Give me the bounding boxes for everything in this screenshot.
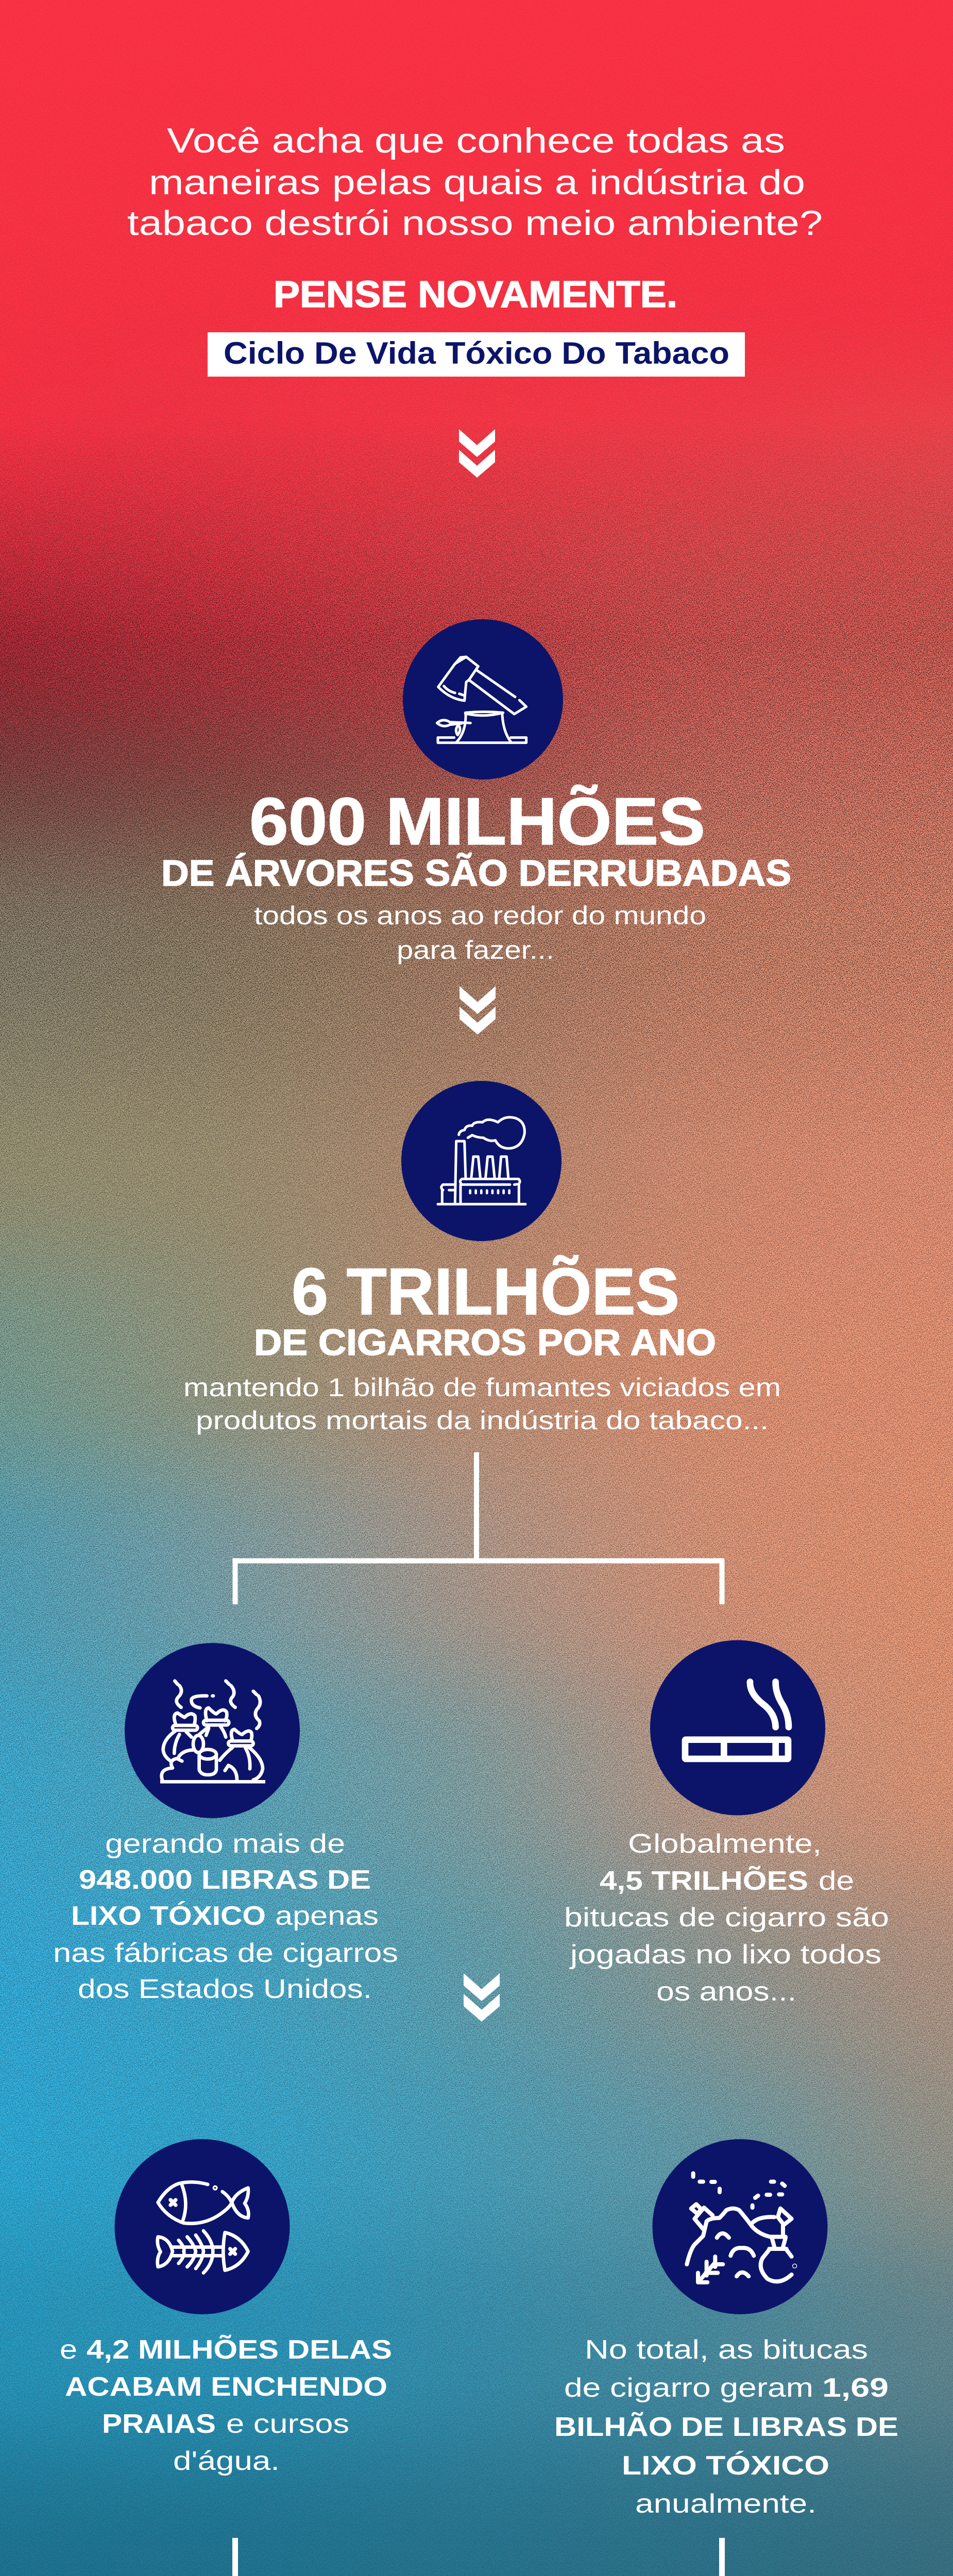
text: 1,69 bilhao: LIXO TÓXICO [622,2451,829,2481]
panel: 4,5 trilhoes de bitucas [564,1640,889,2007]
icon: trash mound [652,2139,827,2314]
text: 4,5 trilhoes [564,1829,889,2007]
text: 948.000 libras: dos Estados Unidos. [78,1974,372,2004]
icon: dead fish [114,2139,290,2314]
heading: pense novamente: PENSE NOVAMENTE. [274,274,677,315]
text: 1,69 bilhao: de cigarro geram [564,2373,813,2403]
subheading: cigarros: DE CIGARROS POR ANO [254,1323,716,1363]
icon: cigarette [650,1640,825,1816]
text: 1,69 bilhao: 1,69 [822,2373,889,2403]
panel: lixo toxico nas fabricas [53,1643,398,2004]
intro question: tabaco destrói nosso meio ambiente? [127,204,823,243]
text: 4,5 trilhoes: os anos... [656,1977,796,2007]
text: 948.000 libras: apenas [275,1901,379,1931]
text: 4,2 milhoes: ACABAM ENCHENDO [65,2372,387,2402]
body text: produtos mortais da indústria do tabaco... [196,1406,769,1435]
figure: 6 trilhoes: 6 TRILHÕES [292,1255,679,1329]
panel: 6 trilhoes [183,1081,781,1435]
icon: garbage bags [125,1643,300,1818]
panel: praias e cursos d'agua [60,2139,392,2476]
text: 4,2 milhoes: d'água. [173,2446,280,2476]
icon: axe and stump [403,619,563,779]
text: 4,2 milhoes: e [60,2335,77,2365]
text: 4,2 milhoes: e cursos [226,2409,349,2439]
arrow: double chevron [464,1973,500,2022]
connector: bottom branch [235,2538,722,2576]
text: 948.000 libras [53,1829,398,2004]
label: ciclo de vida: Ciclo De Vida Tóxico Do Tabaco [224,336,729,370]
text: 4,5 trilhoes: bitucas de cigarro são [564,1903,889,1933]
arrow: double chevron [460,986,496,1035]
label: ciclo de vida [208,332,745,377]
text: 1,69 bilhao [554,2335,898,2519]
text: 948.000 libras: LIXO TÓXICO [71,1901,266,1931]
text: 1,69 bilhao: anualmente. [635,2489,816,2519]
body text: mantendo 1 bilhão de fumantes viciados em [183,1373,781,1402]
panel: 1,69 bilhao de libras [554,2139,898,2519]
intro question: maneiras pelas quais a indústria do [149,163,805,202]
text: 948.000 libras: 948.000 LIBRAS DE [79,1865,371,1895]
intro question [127,121,823,243]
figure: 600 milhoes: 600 MILHÕES [249,784,705,859]
text: 4,2 milhoes [60,2334,392,2476]
text: 4,2 milhoes: 4,2 MILHÕES DELAS [87,2334,392,2365]
body text: para fazer... [397,936,554,964]
body text [254,901,706,964]
text: 948.000 libras: gerando mais de [105,1829,345,1859]
text: 4,5 trilhoes: de [819,1866,854,1896]
text: 1,69 bilhao: BILHÃO DE LIBRAS DE [554,2412,898,2442]
text: 948.000 libras: nas fábricas de cigarros [53,1938,398,1968]
body text [183,1373,781,1435]
text: 4,5 trilhoes: Globalmente, [628,1829,822,1859]
text: 4,5 trilhoes: 4,5 TRILHÕES [600,1866,808,1896]
icon: factory [401,1081,561,1241]
panel: 600 milhoes [161,619,791,964]
text: 4,5 trilhoes: jogadas no lixo todos [569,1940,881,1970]
text: 4,2 milhoes: PRAIAS [102,2409,216,2439]
text: 1,69 bilhao: No total, as bitucas [585,2335,868,2365]
intro question: Você acha que conhece todas as [167,121,785,160]
body text: todos os anos ao redor do mundo [254,901,706,930]
connector: top branch [235,1452,722,1604]
subheading: arvores: DE ÁRVORES SÃO DERRUBADAS [161,853,791,894]
arrow: double chevron [459,429,495,478]
